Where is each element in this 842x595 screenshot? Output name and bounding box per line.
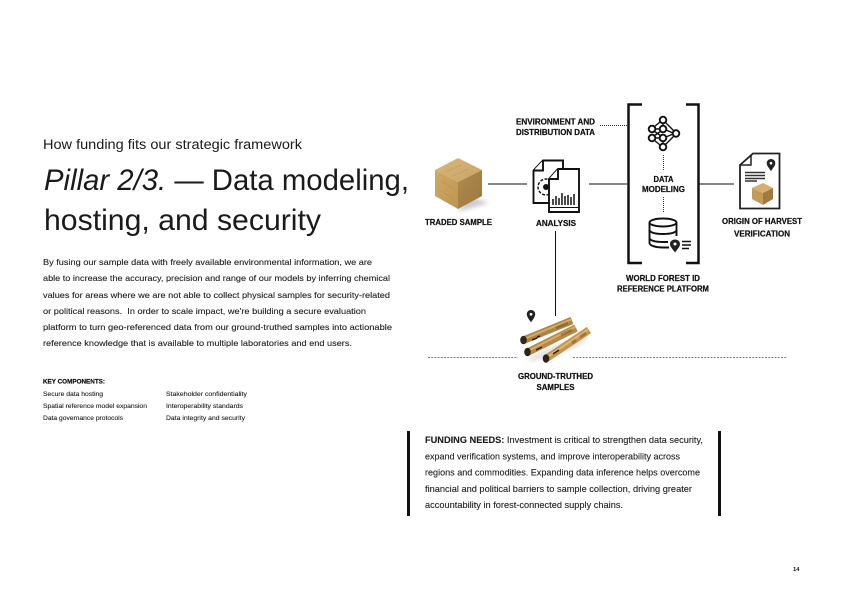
body text: reference knowledge that is available to multiple laboratories and end users. — [43, 338, 352, 348]
key components: Secure data hosting — [43, 391, 103, 398]
label: ground-truthed samples: GROUND-TRUTHED — [518, 372, 593, 381]
platform brackets — [628, 104, 698, 263]
title — [44, 164, 409, 237]
key components: Data integrity and security — [166, 415, 246, 422]
connector: sample to analysis — [488, 183, 527, 185]
body text: values for areas where we are not able to collect physical samples for security-related — [43, 290, 390, 300]
page number: 14 — [793, 567, 800, 573]
callout: funding needs — [407, 431, 721, 516]
label: ground-truthed samples: SAMPLES — [536, 383, 575, 392]
callout: funding needs: financial and political barriers to sample collection, driving greater — [425, 484, 692, 494]
icon: origin of harvest document — [740, 154, 780, 208]
image: ground-truthed sample cores — [520, 320, 590, 365]
callout: funding needs: regions and commodities. Expanding data inference helps overcome — [425, 468, 700, 478]
key components: Data governance protocols — [43, 415, 124, 422]
label: analysis: ANALYSIS — [536, 219, 577, 228]
callout: funding needs: expand verification systems, and improve interoperability across — [425, 452, 680, 462]
body text: or political reasons. In order to scale impact, we're building a secure evaluation — [43, 306, 366, 316]
icon: data modeling network — [649, 117, 679, 150]
environment and distribution label — [516, 118, 595, 137]
label: world forest id platform: REFERENCE PLATFORM — [617, 284, 709, 294]
dotted connector: network to data modeling — [662, 155, 664, 171]
icon: analysis documents — [534, 160, 579, 212]
body text — [43, 257, 392, 348]
dashed baseline — [428, 356, 787, 358]
body text: By fusing our sample data with freely available environmental information, we are — [43, 257, 372, 267]
environment and distribution label: DISTRIBUTION DATA — [516, 128, 595, 137]
body text: platform to turn geo-referenced data from our ground-truthed samples into actionable — [43, 322, 392, 332]
icon: traded sample cube — [435, 158, 489, 212]
label: data modeling: DATA — [654, 175, 674, 184]
title: Pillar 2/3. — Data modeling, — [44, 164, 409, 197]
callout: funding needs: FUNDING NEEDS: Investment is critical to strengthen data security, — [425, 435, 703, 445]
environment and distribution label: ENVIRONMENT AND — [516, 118, 595, 126]
key components — [43, 378, 248, 422]
label: world forest id platform — [617, 274, 709, 294]
key components: KEY COMPONENTS: — [43, 378, 105, 386]
key components: Interoperability standards — [166, 403, 244, 410]
connector: platform to verification — [699, 183, 734, 185]
body text: able to increase the accuracy, precision and range of our models by inferring chemical — [43, 273, 390, 283]
label: data modeling — [642, 175, 685, 194]
connector: analysis to ground-truthed samples — [554, 231, 556, 316]
key components: Spatial reference model expansion — [43, 403, 147, 410]
label: origin of harvest verification — [722, 217, 802, 238]
title: hosting, and security — [44, 204, 321, 237]
dotted connector: environment to platform — [600, 124, 627, 126]
icon: location pin — [527, 310, 535, 322]
subtitle: How funding fits our strategic framework — [43, 137, 302, 152]
key components: Stakeholder confidentiality — [166, 391, 248, 398]
label: origin of harvest verification: ORIGIN OF HARVEST — [722, 217, 802, 226]
connector: analysis to modeling — [589, 183, 627, 185]
dotted connector: data modeling to database — [662, 197, 664, 213]
label: data modeling: MODELING — [642, 185, 685, 194]
label: world forest id platform: WORLD FOREST ID — [626, 274, 700, 283]
label: ground-truthed samples — [518, 372, 593, 392]
label: origin of harvest verification: VERIFICATION — [734, 230, 790, 238]
icon: database with pin — [650, 218, 691, 252]
callout: funding needs: accountability in forest-connected supply chains. — [425, 500, 623, 510]
label: traded sample: TRADED SAMPLE — [425, 218, 493, 227]
